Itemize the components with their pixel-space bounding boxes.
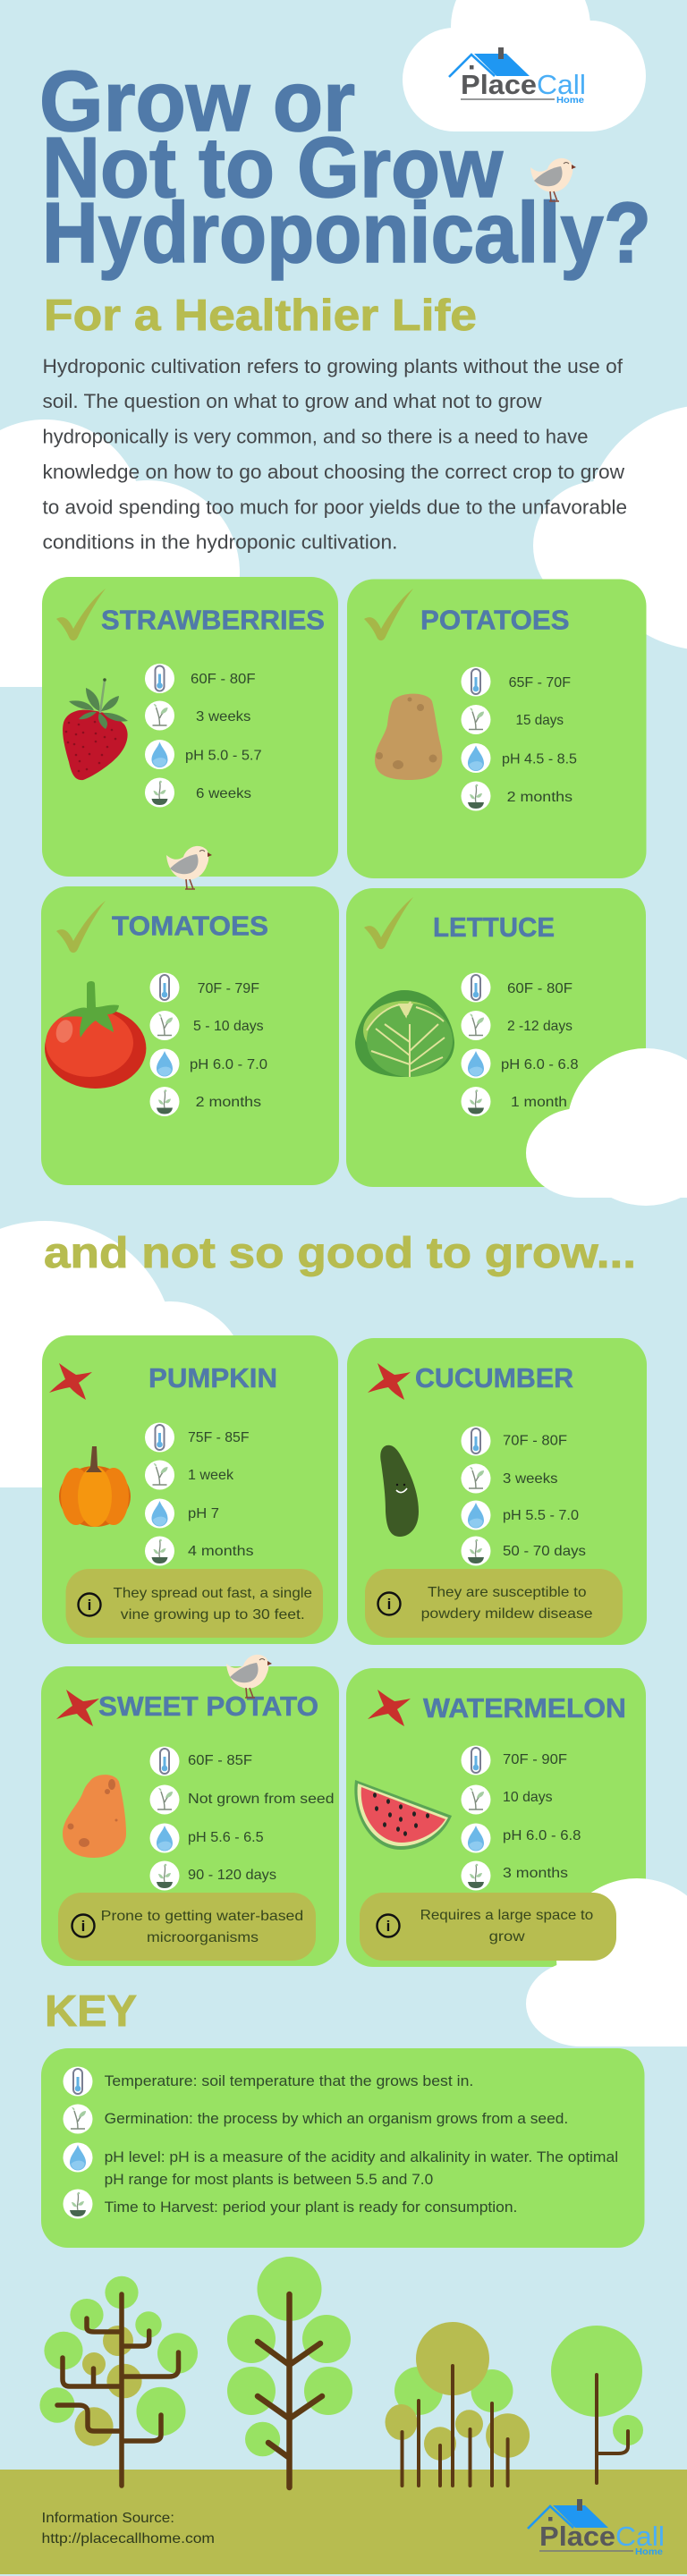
row: temperature: 60F - 80F	[191, 672, 256, 687]
row: pH	[462, 1501, 579, 1530]
intro paragraph: to avoid spending too much for poor yields due to the unfavorable	[43, 496, 627, 519]
icon: watermelon	[354, 1780, 452, 1850]
icon: potato	[375, 694, 442, 780]
row: pH	[145, 740, 262, 769]
row: harvest	[145, 1537, 254, 1565]
row: germination: 3 weeks	[196, 709, 250, 724]
icon: check mark	[56, 901, 106, 953]
callout: pumpkin note: vine growing up to 30 feet.	[121, 1607, 305, 1623]
row: pH: pH 4.5 - 8.5	[502, 751, 577, 767]
row: germination	[145, 701, 250, 730]
row: temperature: 75F - 85F	[188, 1430, 250, 1445]
row: pH	[462, 1048, 579, 1079]
cloud: over lettuce panel	[526, 1048, 687, 1206]
row: harvest: 90 - 120 days	[188, 1868, 276, 1883]
row: temperature	[145, 1422, 250, 1453]
row: germination: 15 days	[515, 713, 564, 728]
row: germination	[150, 1785, 335, 1814]
panel: sweet potato	[41, 1666, 339, 1966]
callout: cucumber note: powdery mildew disease	[421, 1606, 593, 1622]
icon: strawberry	[63, 678, 128, 780]
row: harvest	[150, 1860, 276, 1891]
intro paragraph: conditions in the hydroponic cultivation.	[43, 531, 397, 553]
row: temperature	[462, 667, 571, 696]
row: pH	[462, 743, 577, 773]
row: harvest	[150, 1087, 261, 1116]
row: temperature	[150, 973, 259, 1002]
callout: watermelon note	[360, 1893, 616, 1961]
row: germination	[462, 705, 564, 734]
cloud: over watermelon panel	[526, 1878, 687, 2046]
heading: lettuce: LETTUCE	[433, 911, 555, 943]
information source	[41, 2511, 215, 2546]
row: germination: Not grown from seed	[188, 1792, 335, 1807]
heading: pumpkin: PUMPKIN	[148, 1362, 277, 1394]
heading: watermelon: WATERMELON	[423, 1692, 626, 1724]
row: germination	[462, 1011, 572, 1040]
row: germination: 2 -12 days	[507, 1019, 572, 1034]
title: Grow or	[39, 54, 355, 149]
icon: bird on title	[530, 158, 576, 201]
row: temperature: 60F - 80F	[507, 981, 572, 996]
intro paragraph	[43, 355, 627, 553]
row: harvest	[462, 1087, 567, 1116]
row: harvest: 2 months	[507, 790, 572, 805]
panel: key	[41, 2048, 644, 2248]
heading: strawberries: STRAWBERRIES	[101, 605, 325, 635]
intro paragraph: Hydroponic cultivation refers to growing plants without the use of	[43, 355, 623, 377]
icon: sweet potato	[63, 1775, 126, 1858]
row: harvest: 50 - 70 days	[503, 1544, 586, 1559]
icon: bird on tomatoes panel	[166, 846, 212, 889]
cloud: left behind not-good section	[0, 1221, 246, 1487]
row: pH: pH 5.6 - 6.5	[188, 1830, 264, 1845]
key: temperature: Temperature: soil temperature that the grows best in.	[105, 2073, 473, 2089]
heading: key: KEY	[45, 1987, 137, 2036]
information source: Information Source:	[41, 2511, 174, 2526]
row: temperature	[150, 1746, 252, 1776]
callout: sweet potato note: microorganisms	[147, 1930, 259, 1945]
row: germination	[145, 1460, 234, 1490]
row: temperature: 70F - 90F	[503, 1752, 567, 1767]
callout: sweet potato note: i	[81, 1918, 85, 1935]
row: harvest: 2 months	[196, 1095, 261, 1110]
row: pH: pH 6.0 - 6.8	[503, 1828, 581, 1843]
row: temperature: 70F - 80F	[503, 1433, 567, 1449]
heading: sweet potato: SWEET POTATO	[98, 1690, 318, 1722]
row: pH	[150, 1048, 267, 1079]
callout: cucumber note	[365, 1569, 623, 1638]
key: pH level	[63, 2143, 618, 2188]
icon: cross mark	[368, 1690, 411, 1726]
callout: sweet potato note: Prone to getting water-based	[101, 1909, 303, 1924]
row: harvest: 6 weeks	[196, 786, 251, 801]
icon: lettuce	[355, 990, 454, 1077]
row: harvest	[462, 782, 572, 810]
icon: pumpkin	[59, 1446, 131, 1527]
intro paragraph: soil. The question on what to grow and what not to grow	[43, 390, 542, 412]
row: harvest: 1 month	[511, 1095, 567, 1110]
callout: cucumber note: i	[387, 1596, 391, 1613]
icon: check mark	[56, 589, 106, 640]
section heading: not so good: and not so good to grow...	[44, 1230, 636, 1277]
panel: potatoes	[347, 580, 646, 878]
row: germination	[150, 1011, 264, 1040]
heading: potatoes: POTATOES	[420, 605, 570, 635]
row: temperature	[145, 664, 256, 693]
row: temperature: 65F - 70F	[509, 675, 571, 691]
row: pH: pH 7	[188, 1506, 219, 1521]
callout: watermelon note: i	[386, 1918, 390, 1935]
tree 4	[551, 2326, 643, 2483]
key: germination: Germination: the process by which an organism grows from a seed.	[105, 2111, 568, 2127]
logo: top	[449, 47, 586, 106]
row: harvest	[145, 778, 251, 807]
icon: cross mark	[368, 1363, 411, 1400]
tree 3	[385, 2322, 530, 2486]
cloud: mid left behind intro	[0, 419, 240, 687]
information source: http://placecallhome.com	[41, 2531, 215, 2546]
title: Not to Grow	[42, 120, 503, 216]
row: temperature	[462, 1746, 567, 1775]
heading: cucumber: CUCUMBER	[415, 1362, 573, 1394]
row: temperature: 70F - 79F	[198, 981, 259, 996]
tree 2	[227, 2257, 352, 2487]
icon: check mark	[364, 589, 413, 640]
icon: cucumber	[380, 1445, 419, 1537]
title	[39, 54, 651, 281]
icon: tomato	[45, 981, 146, 1089]
callout: pumpkin note: i	[88, 1597, 91, 1614]
icon: check mark	[364, 897, 413, 949]
row: germination	[462, 1463, 558, 1494]
heading: tomatoes: TOMATOES	[112, 911, 268, 941]
row: germination: 1 week	[188, 1468, 234, 1483]
row: pH: pH 6.0 - 6.8	[501, 1057, 579, 1072]
row: pH	[462, 1823, 581, 1853]
icon: cross mark	[56, 1690, 99, 1726]
row: pH	[150, 1823, 264, 1853]
callout: watermelon note: grow	[489, 1929, 525, 1945]
callout: watermelon note: Requires a large space to	[420, 1908, 593, 1923]
callout: sweet potato note	[58, 1893, 316, 1961]
icon: cross mark	[49, 1363, 92, 1400]
key: pH level: pH level: pH is a measure of the acidity and alkalinity in water. The optimal	[105, 2149, 618, 2165]
logo: bottom	[528, 2499, 665, 2557]
intro paragraph: knowledge on how to go about choosing the correct crop to grow	[43, 461, 624, 483]
key: temperature	[63, 2066, 473, 2097]
tree 1	[39, 2276, 198, 2486]
row: germination: 10 days	[503, 1790, 553, 1805]
row: harvest	[462, 1860, 568, 1891]
row: pH	[145, 1499, 219, 1528]
row: germination	[462, 1785, 553, 1814]
row: harvest	[462, 1537, 586, 1565]
callout: pumpkin note	[66, 1569, 323, 1638]
panel: lettuce	[346, 888, 646, 1187]
ground	[0, 2470, 687, 2574]
key: germination	[63, 2104, 568, 2134]
key: time to harvest	[63, 2190, 517, 2218]
row: pH: pH 5.5 - 7.0	[503, 1508, 579, 1523]
panel: strawberries	[42, 577, 338, 877]
key: time to harvest: Time to Harvest: period your plant is ready for consumption.	[105, 2199, 517, 2216]
row: pH: pH 6.0 - 7.0	[190, 1057, 267, 1072]
row: harvest: 4 months	[188, 1544, 254, 1559]
row: temperature: 60F - 85F	[188, 1753, 252, 1768]
panel: watermelon	[346, 1668, 646, 1967]
key: pH level: pH range for most plants is between 5.5 and 7.0	[105, 2172, 433, 2188]
row: harvest: 3 months	[503, 1866, 568, 1881]
row: pH: pH 5.0 - 5.7	[185, 748, 262, 764]
intro paragraph: hydroponically is very common, and so there is a need to have	[43, 426, 589, 447]
cloud: mid right behind intro	[533, 405, 687, 650]
panel: pumpkin	[42, 1335, 338, 1644]
callout: cucumber note: They are susceptible to	[428, 1585, 587, 1600]
row: germination: 5 - 10 days	[193, 1019, 264, 1034]
icon: bird on sweet potato panel	[226, 1655, 272, 1698]
row: temperature	[462, 973, 572, 1002]
panel: tomatoes	[41, 886, 339, 1185]
row: germination: 3 weeks	[503, 1471, 558, 1487]
row: temperature	[462, 1426, 567, 1456]
callout: pumpkin note: They spread out fast, a single	[113, 1586, 312, 1601]
cloud: top right behind logo	[403, 0, 646, 131]
subtitle: For a Healthier Life	[44, 292, 477, 340]
panel: cucumber	[347, 1338, 647, 1645]
